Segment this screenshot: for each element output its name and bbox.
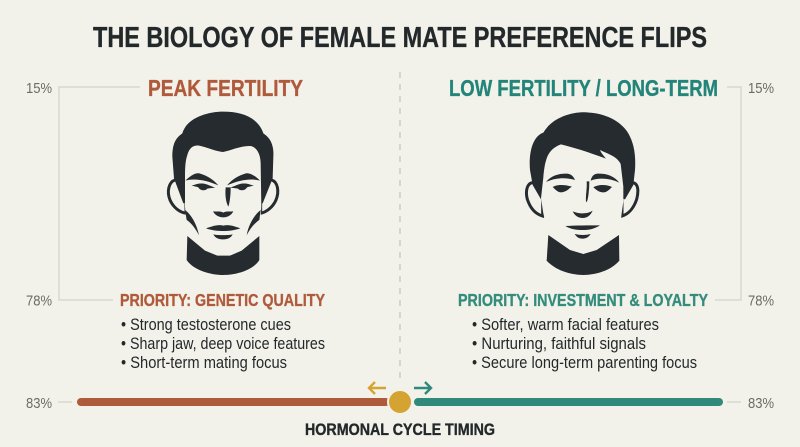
- arrow: toward peak fertility: [369, 382, 386, 394]
- bullet list: investment and loyalty: • Nurturing, faithful signals: [472, 335, 646, 353]
- axis label: HORMONAL CYCLE TIMING: [305, 421, 495, 439]
- scale label: 83% right: 83%: [748, 395, 774, 412]
- icon: masculine face: [168, 112, 278, 275]
- scale label: 78% left: 78%: [26, 292, 52, 310]
- bullet list: investment and loyalty: [472, 316, 697, 372]
- scale label: 15% left: 15%: [26, 80, 52, 97]
- timeline: hormonal cycle timing: [26, 382, 774, 439]
- scale label: 15% right: 15%: [748, 80, 774, 97]
- icon: softer face: [526, 112, 638, 275]
- scale label: 83% left: 83%: [26, 395, 52, 412]
- marker: cycle midpoint: [388, 390, 412, 414]
- bullet list: investment and loyalty: • Softer, warm facial features: [472, 316, 659, 334]
- subheading: genetic quality: PRIORITY: GENETIC QUALITY: [120, 290, 325, 310]
- bullet list: genetic quality: • Strong testosterone cues: [121, 316, 291, 334]
- bullet list: genetic quality: • Short-term mating focus: [121, 354, 287, 372]
- scale label: 78% right: 78%: [748, 292, 774, 310]
- bullet list: genetic quality: • Sharp jaw, deep voice features: [121, 335, 325, 353]
- bar: low fertility side: [418, 398, 719, 406]
- panel: low fertility / long-term: [449, 75, 774, 372]
- bar: peak fertility side: [81, 398, 386, 406]
- bullet list: investment and loyalty: • Secure long-term parenting focus: [472, 354, 697, 372]
- heading: low fertility: LOW FERTILITY / LONG-TERM: [449, 75, 718, 101]
- heading: peak fertility: PEAK FERTILITY: [148, 75, 303, 101]
- arrow: toward low fertility: [414, 382, 431, 394]
- subheading: investment and loyalty: PRIORITY: INVESTMENT & LOYALTY: [458, 290, 708, 310]
- bullet list: genetic quality: [121, 316, 325, 372]
- panel: peak fertility: [26, 75, 325, 372]
